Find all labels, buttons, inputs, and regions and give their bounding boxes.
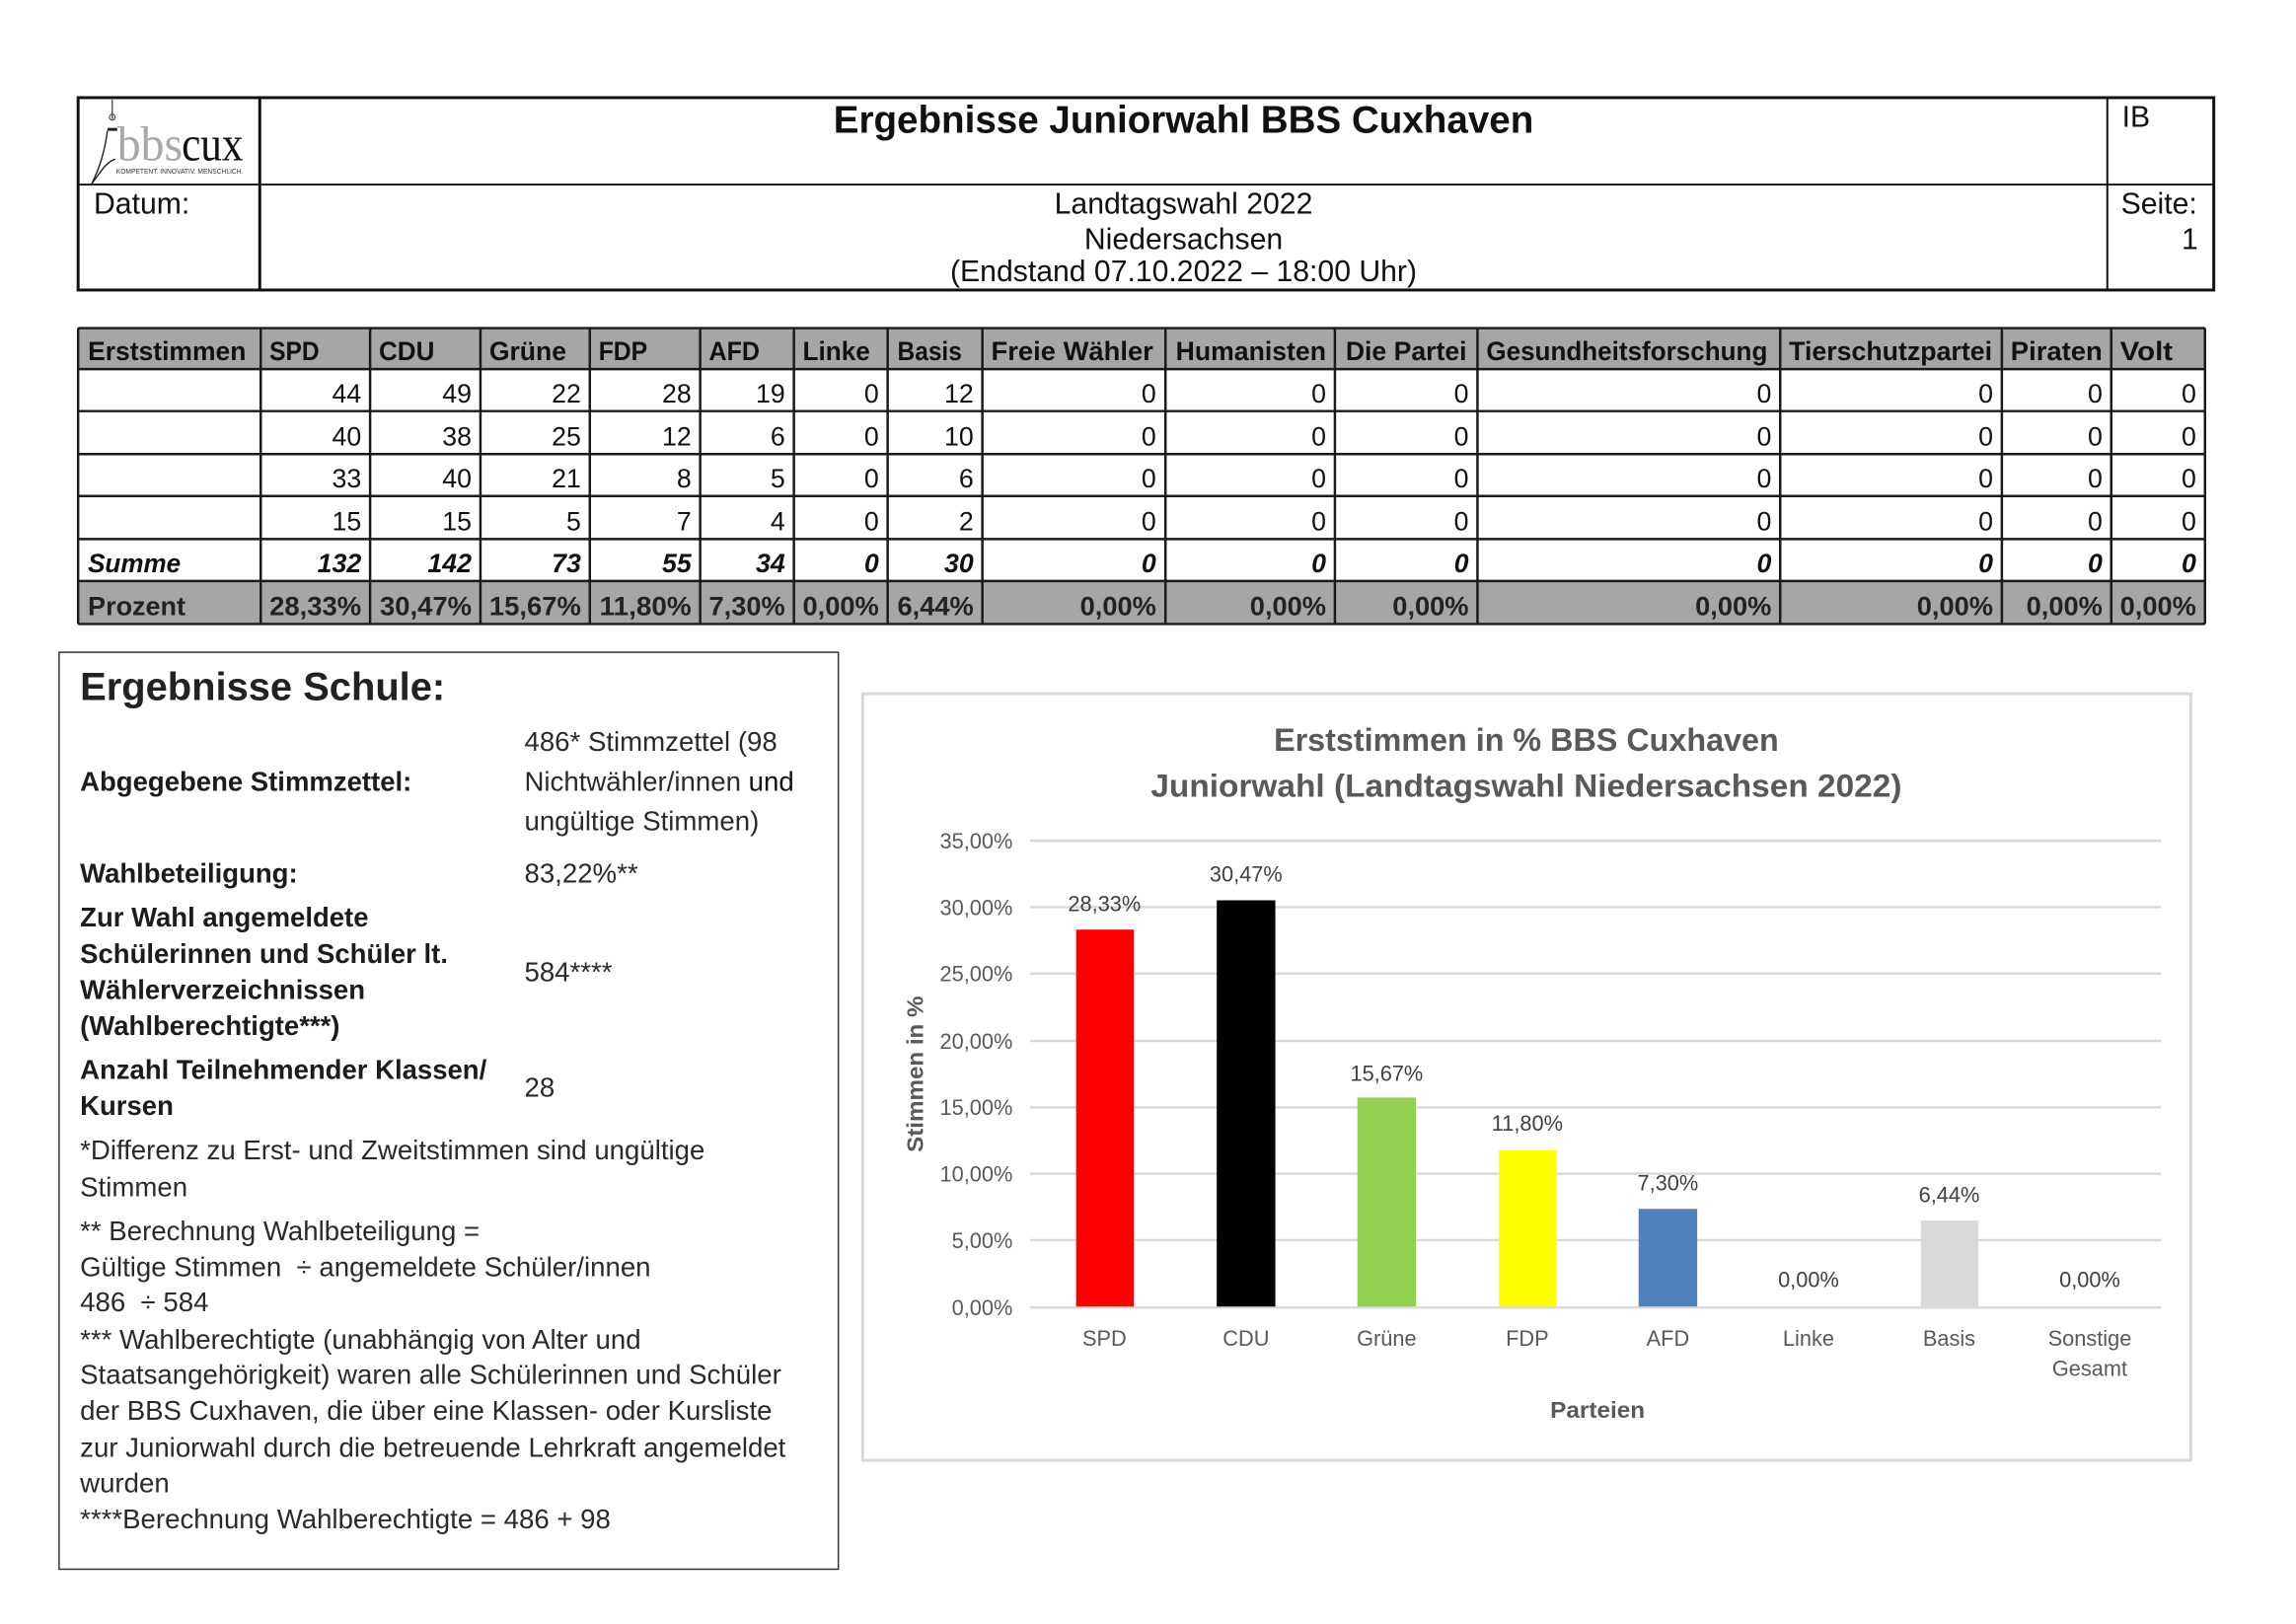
data row 4: 0: [864, 506, 879, 536]
footnotes: Stimmen: [80, 1171, 187, 1202]
data labels: 6,44%: [1919, 1182, 1979, 1207]
data row 3: 21: [552, 464, 581, 493]
data labels: 0,00%: [1778, 1267, 1839, 1292]
y axis title: Stimmen in %: [902, 997, 927, 1152]
data row 2: 0: [1978, 421, 1993, 451]
data row 1: 0: [2088, 379, 2103, 408]
chart title: Juniorwahl (Landtagswahl Niedersachsen 2022): [1150, 768, 1901, 804]
data labels: 7,30%: [1638, 1170, 1698, 1195]
x axis title: Parteien: [1550, 1397, 1645, 1423]
participating classes: [80, 1055, 555, 1121]
turnout: Wahlbeteiligung:: [80, 858, 298, 889]
data labels: 30,47%: [1210, 862, 1283, 887]
initials: IB: [2122, 102, 2150, 134]
data row 3: 0: [1142, 464, 1156, 493]
sum row: [88, 549, 2196, 578]
data row 2: 38: [442, 421, 472, 451]
data labels: [1068, 862, 2120, 1292]
percent row: 0,00%: [1080, 592, 1156, 622]
table header row: Linke: [803, 336, 870, 366]
category labels: Grüne: [1357, 1326, 1417, 1351]
header block: [78, 98, 2214, 290]
data row 1: 0: [1756, 379, 1771, 408]
panel heading: Ergebnisse Schule:: [80, 666, 445, 709]
category labels: CDU: [1222, 1326, 1269, 1351]
table header row: Grüne: [489, 336, 566, 366]
table header row: Erststimmen: [88, 336, 246, 366]
data row 3: 5: [771, 464, 785, 493]
data row 2: 12: [662, 421, 692, 451]
data row 4: 0: [1142, 506, 1156, 536]
sum row: 142: [427, 549, 472, 578]
data row 1: 0: [1142, 379, 1156, 408]
data row 4: [332, 506, 2196, 536]
data row 1: 44: [332, 379, 361, 408]
data row 4: 0: [1454, 506, 1469, 536]
data row 1: 0: [1311, 379, 1326, 408]
percent row: 15,67%: [489, 592, 581, 622]
data row 3: 0: [1756, 464, 1771, 493]
percent row: 11,80%: [600, 592, 692, 622]
table header row: Basis: [898, 336, 962, 366]
table header row: Humanisten: [1176, 336, 1326, 366]
data row 4: 0: [2182, 506, 2196, 536]
footnotes: [79, 1135, 786, 1534]
data row 4: 5: [566, 506, 581, 536]
data row 2: 0: [2182, 421, 2196, 451]
y axis labels: 10,00%: [939, 1162, 1012, 1187]
data row 4: 15: [332, 506, 361, 536]
percent row: 0,00%: [1695, 592, 1772, 622]
logo: bbscux: cux: [182, 116, 244, 171]
table header row: Volt: [2120, 336, 2173, 366]
footnotes: Gültige Stimmen ÷ angemeldete Schüler/innen: [80, 1252, 651, 1283]
data row 2: 10: [944, 421, 974, 451]
chart title: Erststimmen in % BBS Cuxhaven: [1274, 721, 1779, 758]
data row 4: 2: [959, 506, 974, 536]
data row 3: 0: [1311, 464, 1326, 493]
data row 3: 0: [864, 464, 879, 493]
data row 1: 49: [442, 379, 472, 408]
page number: [2121, 188, 2198, 256]
data row 1: 19: [756, 379, 785, 408]
subtitle: Niedersachsen: [1084, 223, 1283, 256]
category labels: Linke: [1783, 1326, 1834, 1351]
percent row: 0,00%: [1917, 592, 1993, 622]
data row 3: 0: [2182, 464, 2196, 493]
logo: bbscux: KOMPETENT. INNOVATIV. MENSCHLICH.: [116, 167, 243, 176]
footnotes: ****Berechnung Wahlberechtigte = 486 + 98: [80, 1504, 611, 1534]
sum row: 132: [318, 549, 361, 578]
data row 2: 6: [771, 421, 785, 451]
subtitle: Landtagswahl 2022: [1055, 188, 1312, 221]
table header row: Piraten: [2011, 336, 2103, 366]
category labels: Basis: [1923, 1326, 1975, 1351]
data row 4: 7: [677, 506, 692, 536]
participating classes: 28: [524, 1071, 555, 1102]
ballots cast: Nichtwähler/innen und: [524, 767, 794, 797]
sum row: 0: [2182, 549, 2196, 578]
table header row: CDU: [379, 336, 434, 366]
percent row: 30,47%: [380, 592, 472, 622]
footnotes: der BBS Cuxhaven, die über eine Klassen- oder Kursliste: [80, 1395, 773, 1426]
registered voters: 584****: [524, 957, 613, 988]
sum row: 0: [1454, 549, 1469, 578]
data row 2: 0: [1142, 421, 1156, 451]
logo: bbscux: [92, 100, 244, 184]
footnotes: *Differenz zu Erst- und Zweitstimmen sind ungültige: [80, 1135, 704, 1165]
y axis labels: 5,00%: [952, 1228, 1012, 1253]
table header row: Tierschutzpartei: [1789, 336, 1992, 366]
data row 2: 0: [2088, 421, 2103, 451]
data labels: 0,00%: [2059, 1267, 2120, 1292]
data row 3: 0: [1454, 464, 1469, 493]
percent row: Prozent: [88, 592, 185, 622]
data row 2: 0: [864, 421, 879, 451]
sum row: 0: [2088, 549, 2103, 578]
data labels: 15,67%: [1350, 1062, 1423, 1086]
data row 4: 0: [2088, 506, 2103, 536]
sum row: 0: [1142, 549, 1156, 578]
table header row: FDP: [599, 336, 647, 366]
turnout: 83,22%**: [524, 858, 638, 889]
data row 3: 8: [677, 464, 692, 493]
y axis labels: 15,00%: [939, 1095, 1012, 1120]
data row 1: 0: [864, 379, 879, 408]
sum row: 0: [1978, 549, 1993, 578]
sum row: 0: [864, 549, 879, 578]
data row 2: 40: [332, 421, 361, 451]
data row 1: [332, 379, 2196, 408]
subtitle: [950, 188, 1417, 288]
sum row: 0: [1311, 549, 1326, 578]
sum row: 0: [1756, 549, 1771, 578]
bars: [1076, 901, 1978, 1306]
table header row: Freie Wähler: [992, 336, 1153, 366]
logo: bbscux: bbs: [117, 116, 183, 171]
sum row: 30: [944, 549, 974, 578]
data row 4: 15: [442, 506, 472, 536]
y axis labels: 20,00%: [939, 1029, 1012, 1054]
data labels: 11,80%: [1492, 1111, 1563, 1136]
data row 1: 28: [662, 379, 692, 408]
data row 3: 0: [1978, 464, 1993, 493]
data row 4: 4: [771, 506, 785, 536]
sum row: Summe: [88, 549, 181, 578]
data row 1: 22: [552, 379, 581, 408]
ballots cast: 486* Stimmzettel (98: [524, 726, 778, 757]
table header row: AFD: [709, 336, 760, 366]
registered voters: Schülerinnen und Schüler lt.: [80, 938, 448, 969]
participating classes: Anzahl Teilnehmender Klassen/: [80, 1055, 487, 1085]
percent row: 6,44%: [898, 592, 974, 622]
footnotes: 486 ÷ 584: [80, 1287, 208, 1317]
y axis labels: 35,00%: [939, 829, 1012, 853]
table header row: Gesundheitsforschung: [1486, 336, 1767, 366]
page number: Seite:: [2121, 188, 2197, 221]
registered voters: Wählerverzeichnissen: [80, 974, 365, 1004]
category labels: AFD: [1647, 1326, 1689, 1351]
category labels: Sonstige: [2048, 1326, 2131, 1351]
data row 2: [332, 421, 2196, 451]
category labels: Gesamt: [2052, 1357, 2127, 1381]
table header row: SPD: [269, 336, 320, 366]
data row 3: [332, 464, 2196, 493]
registered voters: (Wahlberechtigte***): [80, 1010, 339, 1041]
data row 3: 40: [442, 464, 472, 493]
data labels: 28,33%: [1068, 891, 1141, 916]
footnotes: wurden: [79, 1467, 170, 1498]
footnotes: Staatsangehörigkeit) waren alle Schülerinnen und Schüler: [80, 1359, 781, 1389]
ballots cast: Abgegebene Stimmzettel:: [80, 767, 411, 797]
data row 2: 25: [552, 421, 581, 451]
data row 1: 12: [944, 379, 974, 408]
subtitle: (Endstand 07.10.2022 – 18:00 Uhr): [950, 256, 1417, 288]
panel: school results: [59, 652, 839, 1569]
turnout: [80, 858, 638, 889]
data row 1: 0: [1978, 379, 1993, 408]
percent row: 0,00%: [1250, 592, 1326, 622]
bar chart: [862, 694, 2190, 1460]
footnotes: *** Wahlberechtigte (unabhängig von Alter und: [80, 1324, 641, 1355]
y axis labels: 0,00%: [952, 1295, 1012, 1320]
chart title: [1150, 721, 1901, 804]
y axis labels: [939, 829, 1012, 1320]
percent row: 0,00%: [2120, 592, 2196, 622]
percent row: 0,00%: [1392, 592, 1469, 622]
sum row: 34: [756, 549, 785, 578]
ballots cast: [80, 726, 794, 836]
percent row: 7,30%: [709, 592, 785, 622]
sum row: 55: [662, 549, 693, 578]
percent row: 0,00%: [2027, 592, 2103, 622]
title: Ergebnisse Juniorwahl BBS Cuxhaven: [834, 100, 1533, 142]
data row 2: 0: [1756, 421, 1771, 451]
date label: Datum:: [94, 188, 189, 221]
category labels: [1082, 1326, 2131, 1381]
participating classes: Kursen: [80, 1090, 174, 1121]
percent row: 0,00%: [803, 592, 879, 622]
category labels: FDP: [1506, 1326, 1549, 1351]
footnotes: ** Berechnung Wahlbeteiligung =: [80, 1216, 480, 1246]
data row 4: 0: [1311, 506, 1326, 536]
data row 3: 6: [959, 464, 974, 493]
footnotes: zur Juniorwahl durch die betreuende Lehrkraft angemeldet: [80, 1433, 786, 1463]
percent row: 28,33%: [269, 592, 361, 622]
data row 1: 0: [1454, 379, 1469, 408]
data row 3: 33: [332, 464, 361, 493]
data row 4: 0: [1978, 506, 1993, 536]
y axis labels: 25,00%: [939, 962, 1012, 987]
ballots cast: ungültige Stimmen): [524, 805, 759, 836]
data row 2: 0: [1454, 421, 1469, 451]
percent row: [88, 592, 2196, 622]
category labels: SPD: [1082, 1326, 1127, 1351]
registered voters: [80, 902, 613, 1041]
sum row: 73: [552, 549, 581, 578]
y axis labels: 30,00%: [939, 895, 1012, 920]
data row 3: 0: [2088, 464, 2103, 493]
table header row: [88, 336, 2173, 366]
data row 4: 0: [1756, 506, 1771, 536]
data row 2: 0: [1311, 421, 1326, 451]
results table: [78, 329, 2205, 624]
page number: 1: [2182, 223, 2198, 256]
registered voters: Zur Wahl angemeldete: [80, 902, 369, 932]
data row 1: 0: [2182, 379, 2196, 408]
table header row: Die Partei: [1346, 336, 1467, 366]
